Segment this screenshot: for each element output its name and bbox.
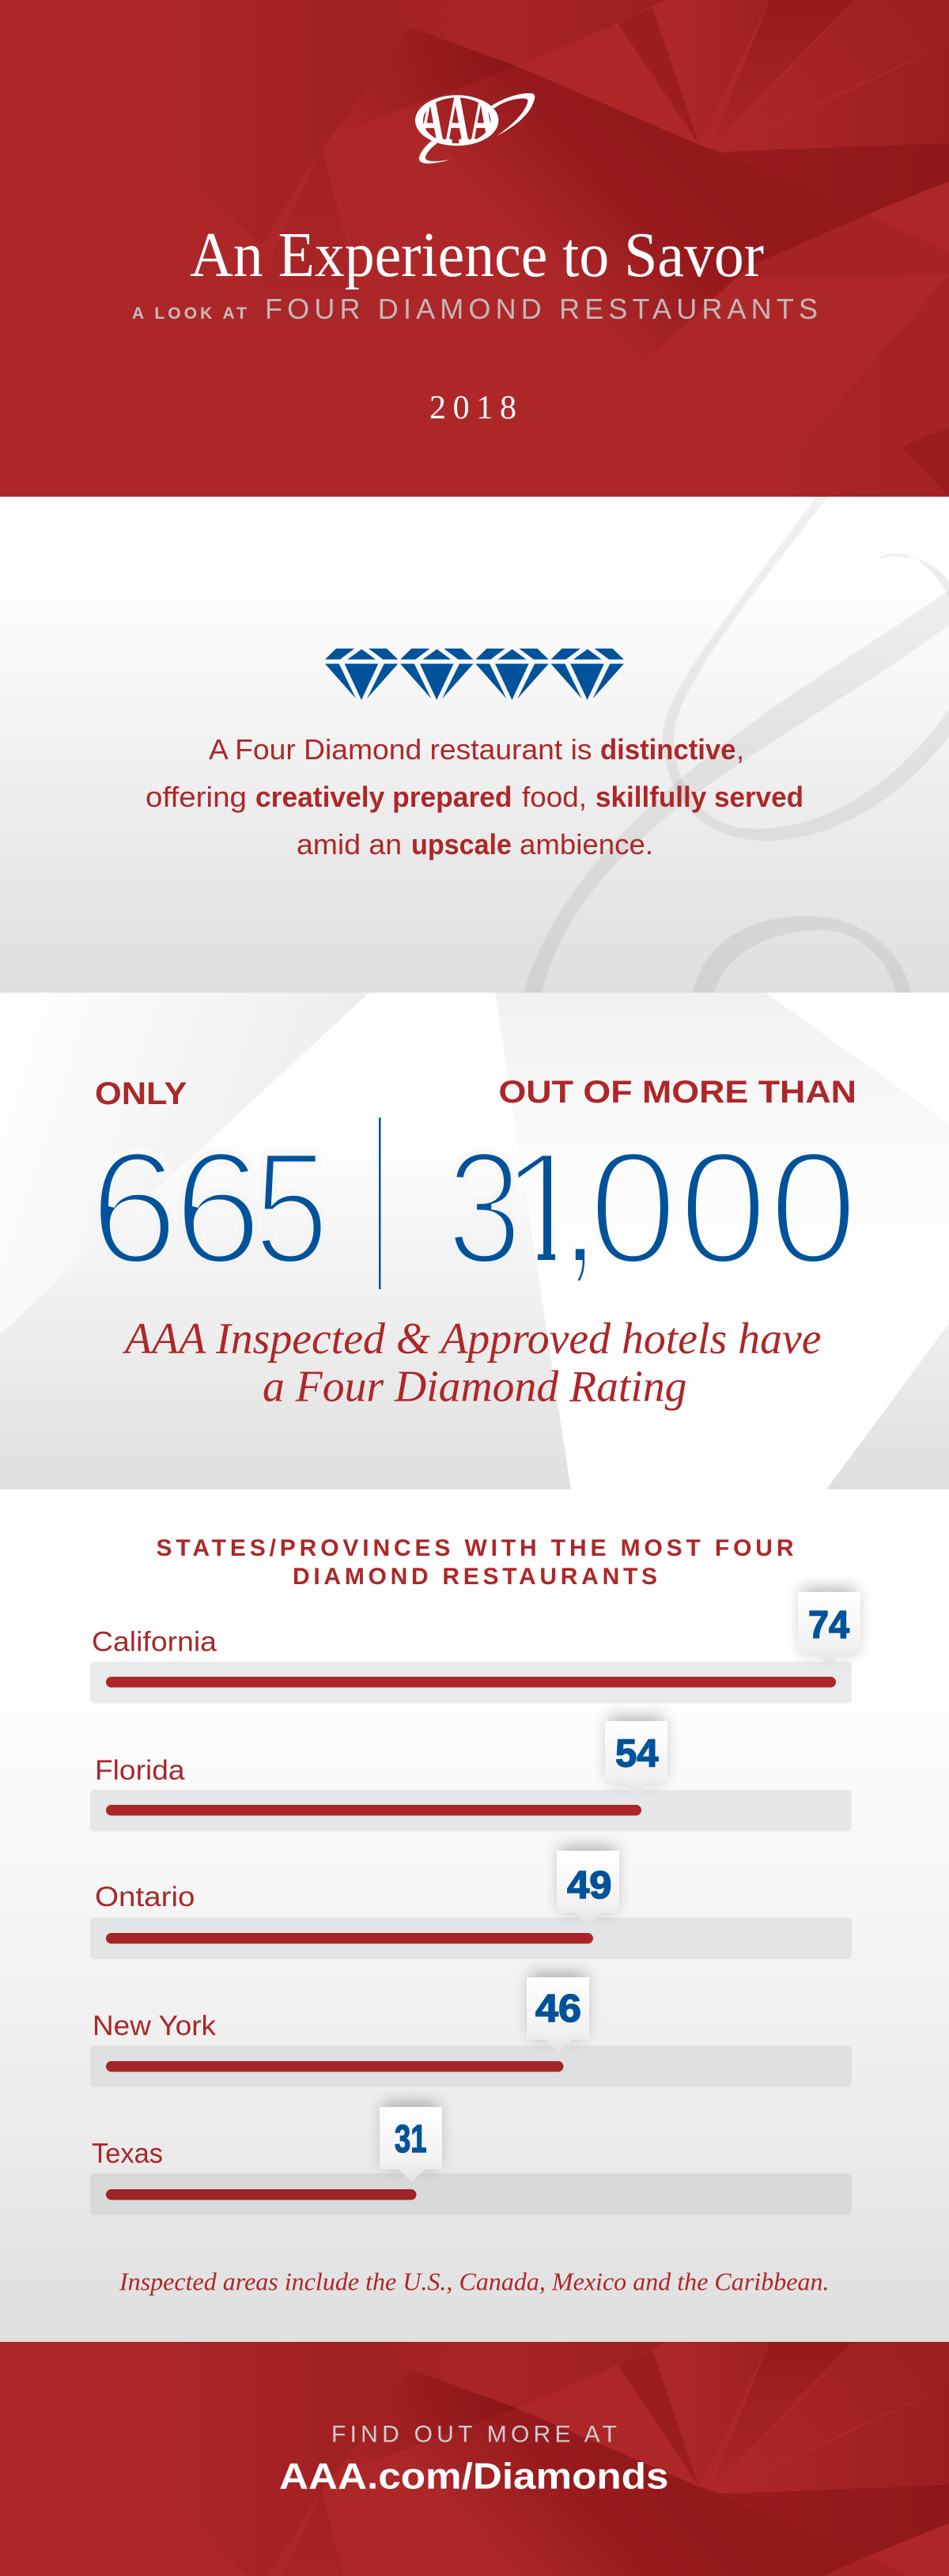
year: 2018 — [429, 390, 516, 426]
caption — [122, 1314, 821, 1411]
bar row: California: 74 — [808, 1604, 849, 1647]
definition text: , — [736, 733, 744, 766]
bar row: New York: 46 — [535, 1988, 581, 2030]
icon: four diamonds — [325, 649, 624, 700]
definition text: creatively prepared — [255, 781, 512, 813]
footnote: Inspected areas include the U.S., Canada, Mexico and the Caribbean. — [119, 2267, 829, 2295]
chart heading: DIAMOND RESTAURANTS — [293, 1564, 657, 1590]
number: 665: 5 — [254, 1118, 329, 1298]
bar row: Ontario: 49 — [567, 1864, 612, 1907]
number: 31,000: 3 — [447, 1118, 522, 1298]
bar row: California: California — [92, 1626, 217, 1658]
bar row: Ontario: Ontario — [95, 1882, 195, 1912]
bar row: New York: New York — [93, 2010, 217, 2041]
definition text: distinctive — [600, 733, 735, 766]
bar row: California — [90, 1588, 860, 1704]
definition text: food, — [522, 781, 587, 813]
number: 31,000 — [455, 1154, 849, 1280]
panel: ranking — [0, 1489, 949, 2342]
definition text — [146, 733, 803, 861]
caption: AAA Inspected & Approved hotels have — [122, 1314, 821, 1364]
bar row: Florida — [90, 1717, 852, 1832]
bar row: Florida: Florida — [95, 1755, 185, 1786]
panel: definition — [0, 497, 949, 993]
number: 31,000: 1 — [500, 1118, 589, 1298]
panel: header — [0, 0, 949, 497]
background script flourish — [524, 497, 949, 993]
call to action label: FIND OUT MORE AT — [331, 2422, 617, 2447]
bar row: Florida: 54 — [615, 1732, 658, 1775]
bar row: New York — [90, 1973, 852, 2087]
bar row: Texas: Texas — [92, 2139, 163, 2169]
definition text: upscale — [411, 828, 512, 861]
definition text: skillfully served — [595, 781, 803, 813]
chart heading: STATES/PROVINCES WITH THE MOST FOUR — [157, 1535, 794, 1561]
title: An Experience to Savor — [190, 221, 764, 290]
definition text: amid an — [297, 828, 402, 861]
bar row: Texas — [90, 2103, 852, 2215]
number: 31,000: ,000 — [558, 1118, 858, 1298]
bar row: Ontario — [90, 1847, 852, 1959]
bar row: Texas: 31 — [395, 2118, 427, 2161]
caption: a Four Diamond Rating — [263, 1362, 686, 1411]
panel: statistics — [0, 993, 949, 1489]
number: 665: 66 — [89, 1118, 263, 1298]
subtitle: A LOOK AT — [132, 305, 247, 323]
chart heading — [157, 1535, 794, 1590]
label: only: ONLY — [95, 1076, 187, 1111]
label: out of more than: OUT OF MORE THAN — [498, 1075, 856, 1110]
definition text: offering — [146, 781, 247, 813]
icon: AAA logo — [415, 93, 535, 164]
definition text: ambience. — [520, 828, 653, 861]
icon: AAA logo: AAA — [419, 81, 495, 158]
definition text: A Four Diamond restaurant is — [209, 733, 592, 766]
subtitle: FOUR DIAMOND RESTAURANTS — [265, 293, 818, 325]
panel: footer — [0, 2342, 949, 2576]
link text: AAA.com/Diamonds — [279, 2455, 669, 2496]
divider — [379, 1118, 381, 1289]
